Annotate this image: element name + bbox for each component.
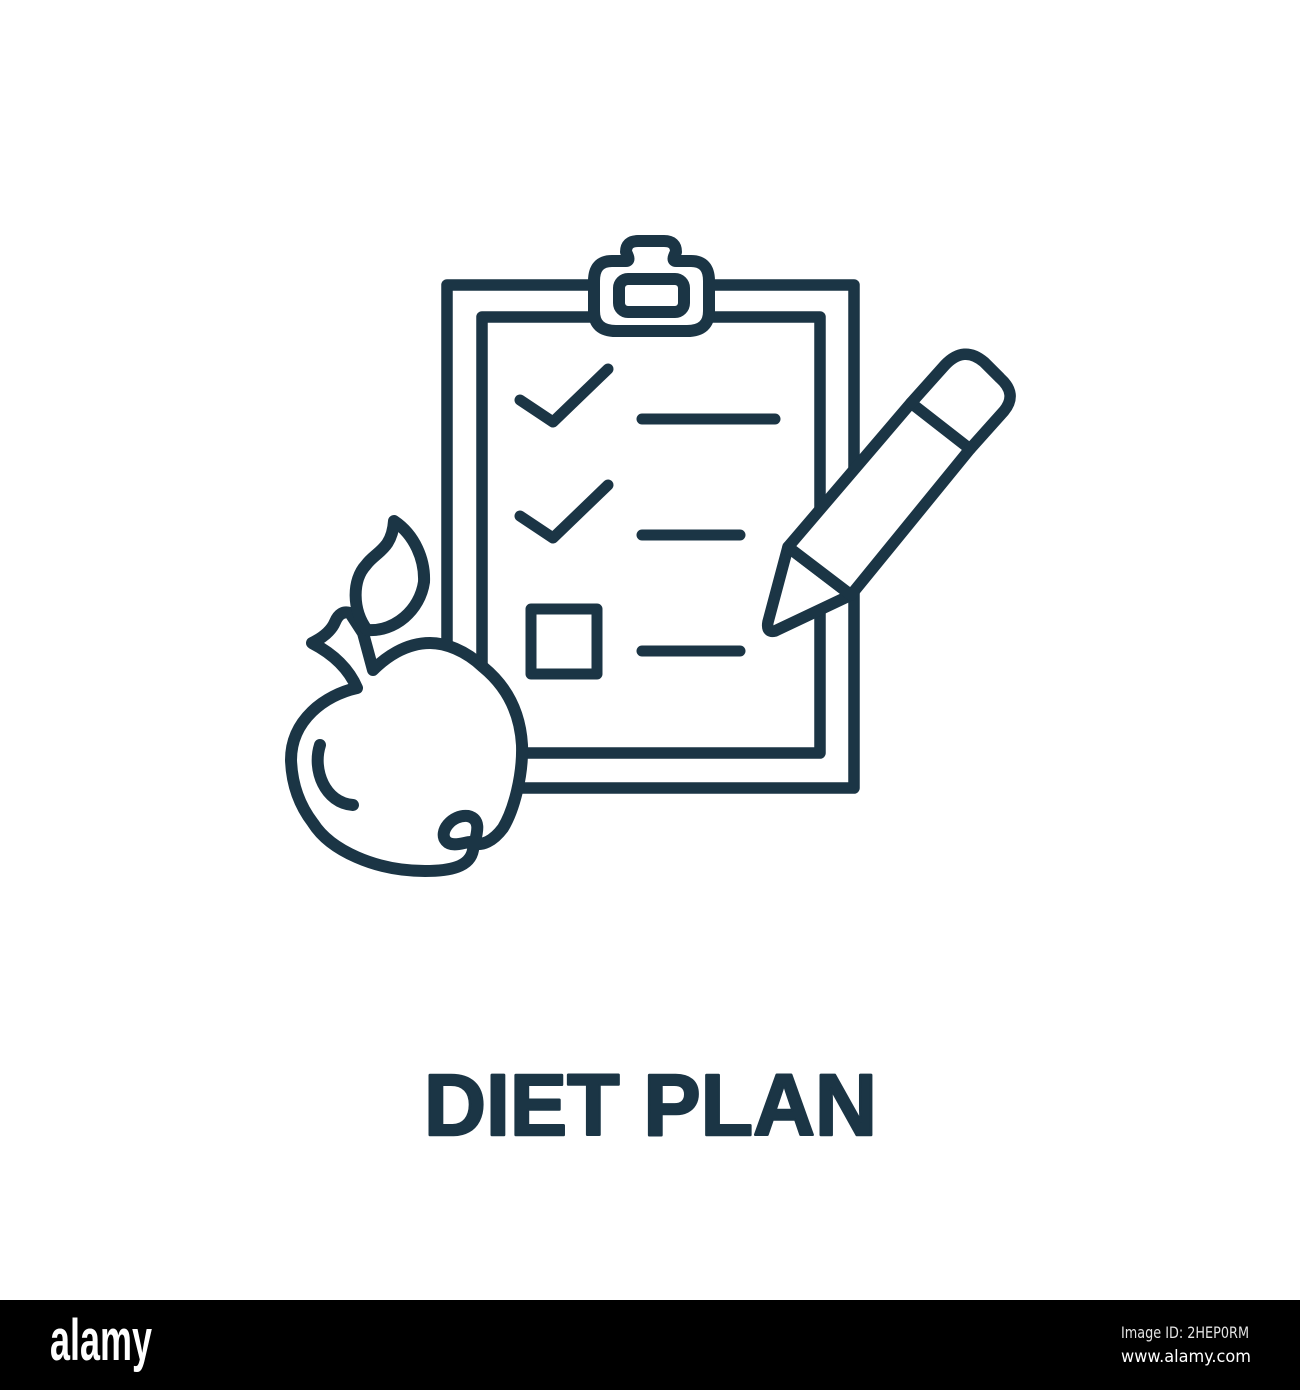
- checklist row 2: check mark and line: [520, 485, 740, 538]
- icon: diet plan clipboard, pencil and apple: [291, 241, 1011, 871]
- website: www.alamy.com: [1121, 1347, 1251, 1367]
- clipboard board outer: [447, 285, 854, 788]
- footer logo: alamy: [50, 1308, 152, 1373]
- apple leaf: [356, 521, 424, 630]
- clipboard paper: [482, 317, 820, 753]
- image id: Image ID: 2HEP0RM: [1121, 1323, 1249, 1342]
- title: DIET PLAN: [424, 1057, 877, 1154]
- checklist row 3: empty checkbox and line: [531, 609, 740, 674]
- apple highlight: [318, 745, 353, 805]
- footer bar: [0, 1300, 1300, 1390]
- icon: apple: [291, 521, 522, 871]
- clipboard clip: [594, 241, 709, 331]
- icon: pencil: [768, 354, 1011, 631]
- checklist row 1: check mark and line: [520, 369, 775, 422]
